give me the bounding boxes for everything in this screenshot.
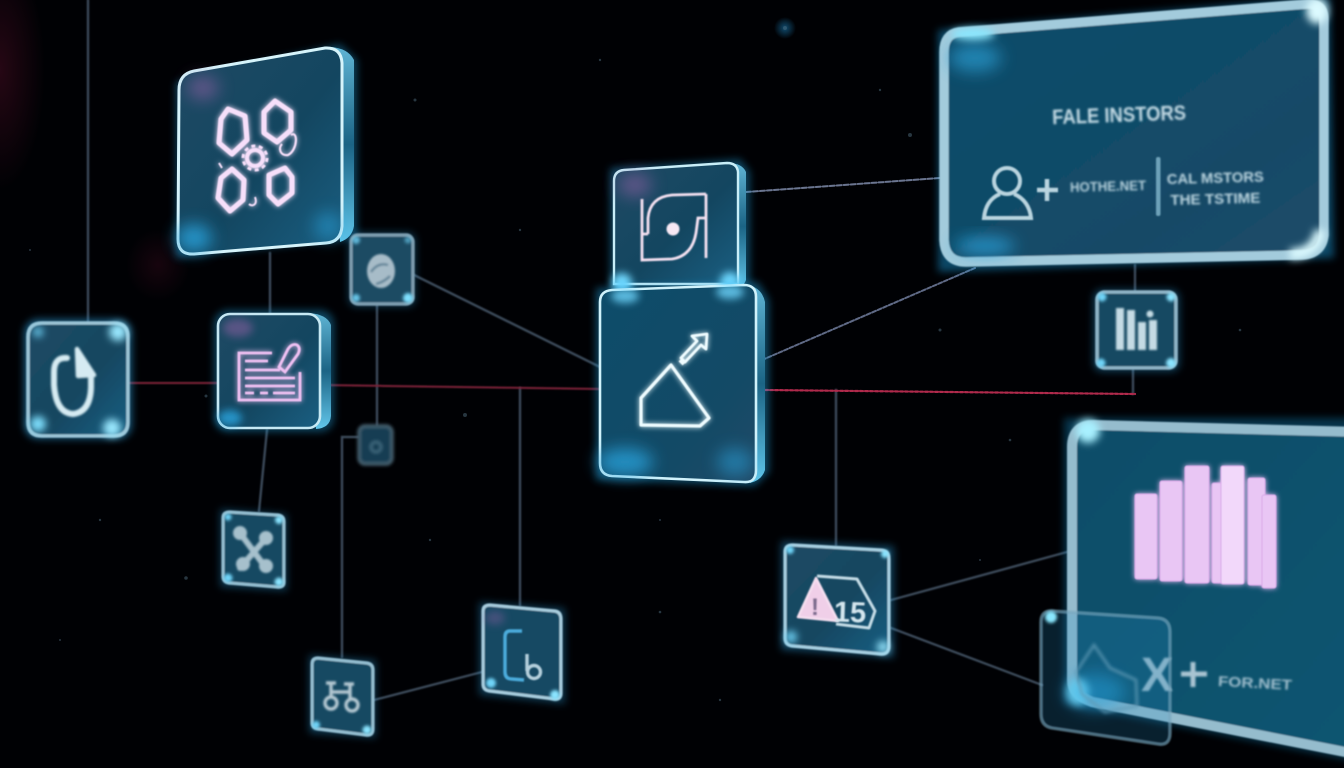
panel: small bars node [1093, 289, 1180, 372]
icon: mini bar chart [1116, 308, 1157, 350]
text: caption: THE TSTIME [1170, 190, 1261, 209]
panel: left refresh node [24, 319, 132, 439]
text: exclamation: ! [811, 594, 819, 621]
divider [1156, 157, 1160, 216]
panel: bike node [309, 655, 376, 738]
icon: triangle house with arrow [641, 334, 709, 426]
icon: hexagons and gear [218, 101, 296, 211]
icon: tag outline [817, 576, 875, 628]
icon: warning triangle [798, 578, 838, 621]
text: FOR.NET: FOR.NET [1218, 673, 1292, 694]
heading: FALE INSTORS: FALE INSTORS [1052, 101, 1186, 129]
panel: phone node [479, 602, 565, 704]
icon: dot [371, 442, 381, 452]
icon: bike [325, 683, 358, 711]
text: network label: HOTHE.NET [1070, 178, 1147, 195]
text: number 15: 15 [833, 596, 867, 630]
icon: letter b [527, 654, 540, 678]
panel: warning node [781, 541, 894, 658]
icon: globe [367, 254, 395, 288]
panel: center top swirl card [610, 159, 750, 293]
icon: faint star [1076, 645, 1137, 712]
panel: center main card [596, 282, 769, 486]
panel: form and pen node [214, 310, 334, 432]
panel: small dark node [359, 426, 392, 464]
icon: crossed tools [236, 529, 270, 570]
icon: user plus [984, 168, 1058, 218]
panel: top-left gears card [176, 44, 357, 258]
icon: center dot [666, 222, 680, 236]
icon: swirl [642, 194, 706, 260]
panel: small circle node [348, 232, 416, 307]
text: caption: CAL MSTORS [1167, 169, 1264, 188]
icon: plus [1181, 662, 1207, 687]
panel: translucent star card overlapping chart [1041, 611, 1170, 744]
icon: refresh arrow [54, 349, 94, 414]
connector lines [88, 0, 1135, 700]
panel: top-right investors card [938, 0, 1334, 272]
icon: overlapping bar chart [1135, 466, 1276, 588]
icon: form with pen [239, 344, 300, 400]
icon: phone outline [505, 631, 524, 680]
text: X: X [1141, 649, 1173, 702]
panel: x-shaped icon node [220, 509, 287, 591]
panel: bottom-right chart card [1064, 418, 1344, 762]
